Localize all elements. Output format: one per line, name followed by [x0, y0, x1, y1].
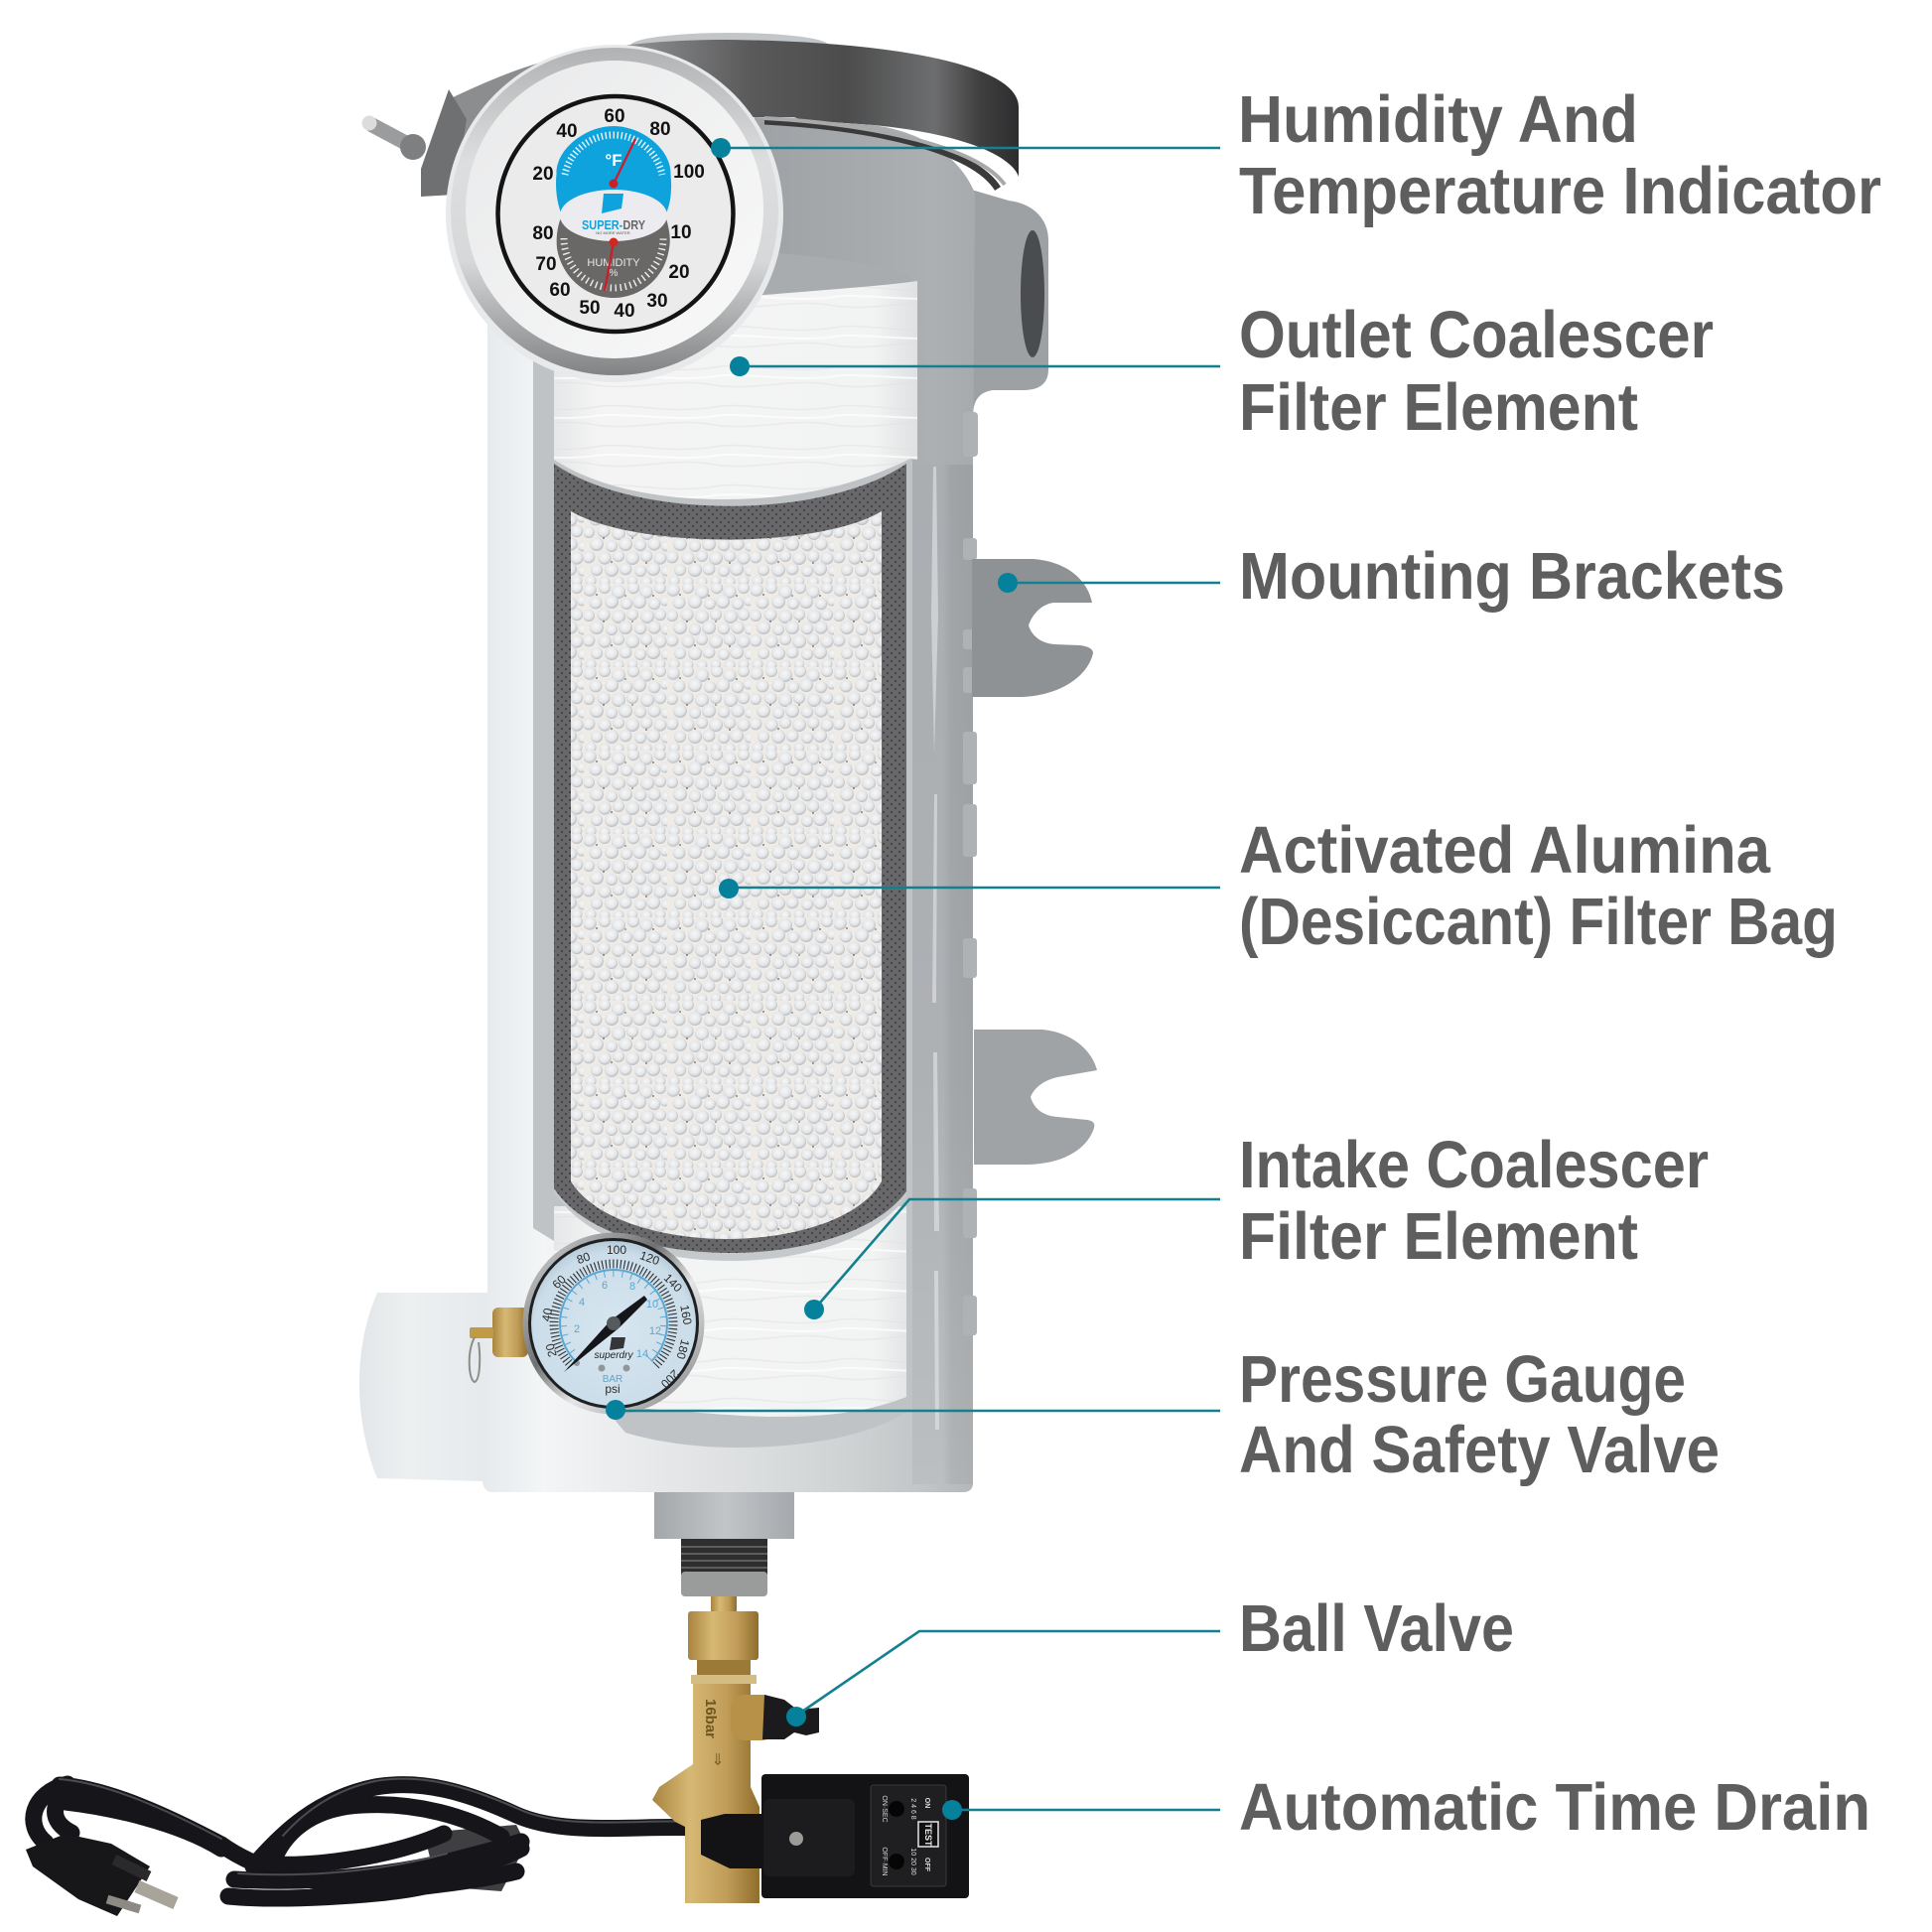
timer control panel: ON·SEC	[881, 1795, 888, 1823]
wall glints	[931, 467, 939, 1430]
casting bumps	[963, 412, 978, 1335]
intake coalescer filter element	[554, 1206, 906, 1417]
label: humidity and temperature indicator	[1238, 82, 1881, 228]
needles	[614, 139, 635, 184]
timer control panel: 2 4 6 8	[909, 1798, 916, 1820]
psi numbers: 180	[673, 1338, 692, 1361]
humidity and temperature indicator	[446, 45, 783, 382]
leader: time drain	[942, 1800, 1220, 1820]
solenoid connector	[763, 1799, 855, 1876]
psi numbers: 120	[638, 1248, 661, 1268]
humidity sector	[557, 215, 670, 298]
upper scale numbers: 40	[556, 121, 578, 142]
brand logo	[602, 194, 623, 213]
brass hex fitting	[688, 1611, 759, 1660]
tick rings	[565, 135, 662, 175]
psi numbers: 100	[607, 1243, 626, 1257]
label: activated alumina filter bag: Activated Alumina	[1239, 813, 1771, 888]
upper scale numbers: 60	[604, 106, 625, 127]
lower scale numbers: 80	[532, 223, 554, 244]
leader: ball valve	[786, 1631, 1220, 1726]
ball valve knob	[762, 1695, 819, 1739]
threaded nipple	[681, 1539, 767, 1575]
safety valve	[470, 1308, 528, 1382]
psi numbers: 200	[658, 1367, 682, 1391]
timer control panel: ON	[923, 1798, 930, 1808]
leader: intake coalescer	[804, 1199, 1220, 1319]
bar numbers: 14	[636, 1348, 648, 1360]
label: intake coalescer filter element: Filter Element	[1239, 1199, 1638, 1274]
psi numbers: 20	[543, 1341, 560, 1358]
label: outlet coalescer filter element: Outlet Coalescer	[1239, 298, 1714, 372]
label: pressure gauge and safety valve: Pressure Gauge	[1239, 1342, 1686, 1417]
gauge rivets	[574, 1360, 629, 1372]
gauge logo	[610, 1337, 625, 1350]
leader: mounting brackets	[998, 573, 1220, 593]
timer housing	[761, 1774, 969, 1898]
labels	[1238, 82, 1881, 1845]
label: activated alumina filter bag	[1239, 813, 1838, 959]
leader: pressure gauge	[606, 1400, 1220, 1420]
psi numbers: 140	[661, 1271, 685, 1295]
plug prongs	[107, 1860, 176, 1909]
label: ball valve: Ball Valve	[1239, 1591, 1514, 1666]
bag shadow	[554, 1181, 906, 1261]
label: humidity and temperature indicator: Humidity And	[1238, 82, 1638, 157]
psi numbers: 40	[539, 1307, 555, 1322]
timer control panel: OFF	[923, 1858, 930, 1872]
callout leaders	[606, 138, 1220, 1820]
leader: outlet coalescer	[730, 356, 1220, 376]
bar scale	[560, 1270, 667, 1361]
humidity and temperature indicator: NO MORE WATER.	[596, 230, 631, 235]
timer control panel	[871, 1785, 946, 1886]
upper scale numbers	[532, 106, 705, 185]
psi numbers: 60	[549, 1272, 569, 1292]
power cord strands	[34, 1784, 701, 1898]
top cap and clamp band	[361, 33, 1019, 197]
housing shell	[359, 117, 973, 1492]
steel band	[449, 40, 1019, 177]
label: outlet coalescer filter element: Filter Element	[1239, 370, 1638, 445]
humidity and temperature indicator: %	[610, 268, 619, 279]
psi numbers: 80	[575, 1249, 593, 1267]
label: outlet coalescer filter element	[1239, 298, 1714, 445]
brass neck	[711, 1596, 737, 1614]
humidity label: HUMIDITY	[587, 257, 640, 269]
unit labels: BAR	[603, 1374, 622, 1385]
outlet port	[968, 189, 1048, 417]
pressure gauge and safety valve: superdry	[595, 1350, 633, 1361]
desiccant beads	[571, 511, 882, 1239]
upper mounting bracket	[972, 559, 1093, 697]
cutaway cavity	[533, 250, 917, 1448]
bar numbers: 12	[649, 1325, 661, 1337]
activated alumina filter bag	[554, 464, 906, 1253]
cord and plug	[26, 1779, 701, 1916]
bar numbers: 6	[602, 1280, 608, 1292]
label: mounting brackets: Mounting Brackets	[1239, 539, 1785, 614]
lower scale numbers: 50	[579, 298, 601, 319]
cord highlights	[60, 1779, 701, 1874]
galvanized coupling	[681, 1572, 767, 1596]
brass valve body	[652, 1675, 776, 1903]
psi numbers: 160	[677, 1304, 695, 1326]
lower scale numbers: 10	[670, 222, 692, 243]
flange face	[466, 61, 763, 358]
lower scale numbers: 20	[668, 262, 690, 283]
clamp bolt	[372, 125, 417, 149]
temperature sector	[556, 126, 671, 215]
lower scale numbers: 40	[614, 301, 635, 322]
flange rim	[446, 45, 783, 382]
leader: humidity indicator	[711, 138, 1220, 158]
bar numbers: 8	[629, 1281, 635, 1293]
brass marking: 16bar	[702, 1699, 719, 1738]
upper shaded wall	[755, 117, 975, 467]
bar numbers: 4	[579, 1297, 585, 1309]
tape bundle	[424, 1825, 526, 1891]
lower scale numbers: 60	[549, 280, 571, 301]
bar numbers: 10	[646, 1299, 658, 1311]
bar numbers: 2	[574, 1323, 580, 1335]
pressure gauge and safety valve	[470, 1233, 705, 1414]
dial face	[498, 96, 733, 332]
timer control panel: 10 20 30	[909, 1848, 916, 1875]
test button	[918, 1822, 938, 1847]
label: automatic time drain: Automatic Time Drain	[1239, 1770, 1870, 1845]
label: intake coalescer filter element	[1239, 1128, 1709, 1274]
brass valve body: ⇒	[709, 1752, 726, 1766]
back wall	[695, 250, 917, 298]
timer control panel: OFF·MIN	[881, 1847, 888, 1876]
brand name: SUPER-DRY	[582, 217, 645, 232]
lower scale numbers: 30	[646, 291, 668, 312]
timer control panel: TEST	[923, 1823, 933, 1847]
leader: desiccant bag	[719, 879, 1220, 898]
degree label: °F	[605, 151, 622, 170]
left clamp bracket	[421, 89, 467, 197]
label: pressure gauge and safety valve	[1239, 1342, 1720, 1487]
label: pressure gauge and safety valve: And Safety Valve	[1239, 1413, 1720, 1487]
outlet coalescer filter element	[554, 281, 917, 499]
clamp strap	[764, 118, 1005, 189]
upper scale numbers: 20	[532, 164, 554, 185]
needle	[564, 1296, 647, 1372]
upper scale numbers: 80	[649, 119, 671, 140]
label: intake coalescer filter element: Intake Coalescer	[1239, 1128, 1709, 1202]
plug body	[26, 1834, 150, 1916]
brand ellipse	[560, 190, 667, 241]
bar numbers	[574, 1280, 661, 1360]
label: humidity and temperature indicator: Temperature Indicator	[1239, 154, 1881, 228]
drain assembly	[652, 1539, 969, 1903]
gauge bezel	[522, 1233, 705, 1414]
upper scale numbers: 100	[673, 162, 705, 183]
psi numbers	[539, 1243, 695, 1391]
right wall	[912, 465, 973, 1484]
gauge face	[531, 1241, 696, 1406]
lower scale numbers	[532, 222, 692, 322]
bottom plug	[654, 1492, 794, 1539]
label: activated alumina filter bag: (Desiccant) Filter Bag	[1239, 885, 1838, 959]
outlet port opening	[1021, 230, 1044, 357]
lower scale numbers: 70	[535, 254, 557, 275]
cavity recess	[533, 262, 912, 1448]
psi scale	[554, 1264, 673, 1365]
pressure gauge and safety valve: psi	[605, 1382, 621, 1396]
filter housing body	[359, 117, 1097, 1539]
lower mounting bracket	[974, 1030, 1097, 1165]
